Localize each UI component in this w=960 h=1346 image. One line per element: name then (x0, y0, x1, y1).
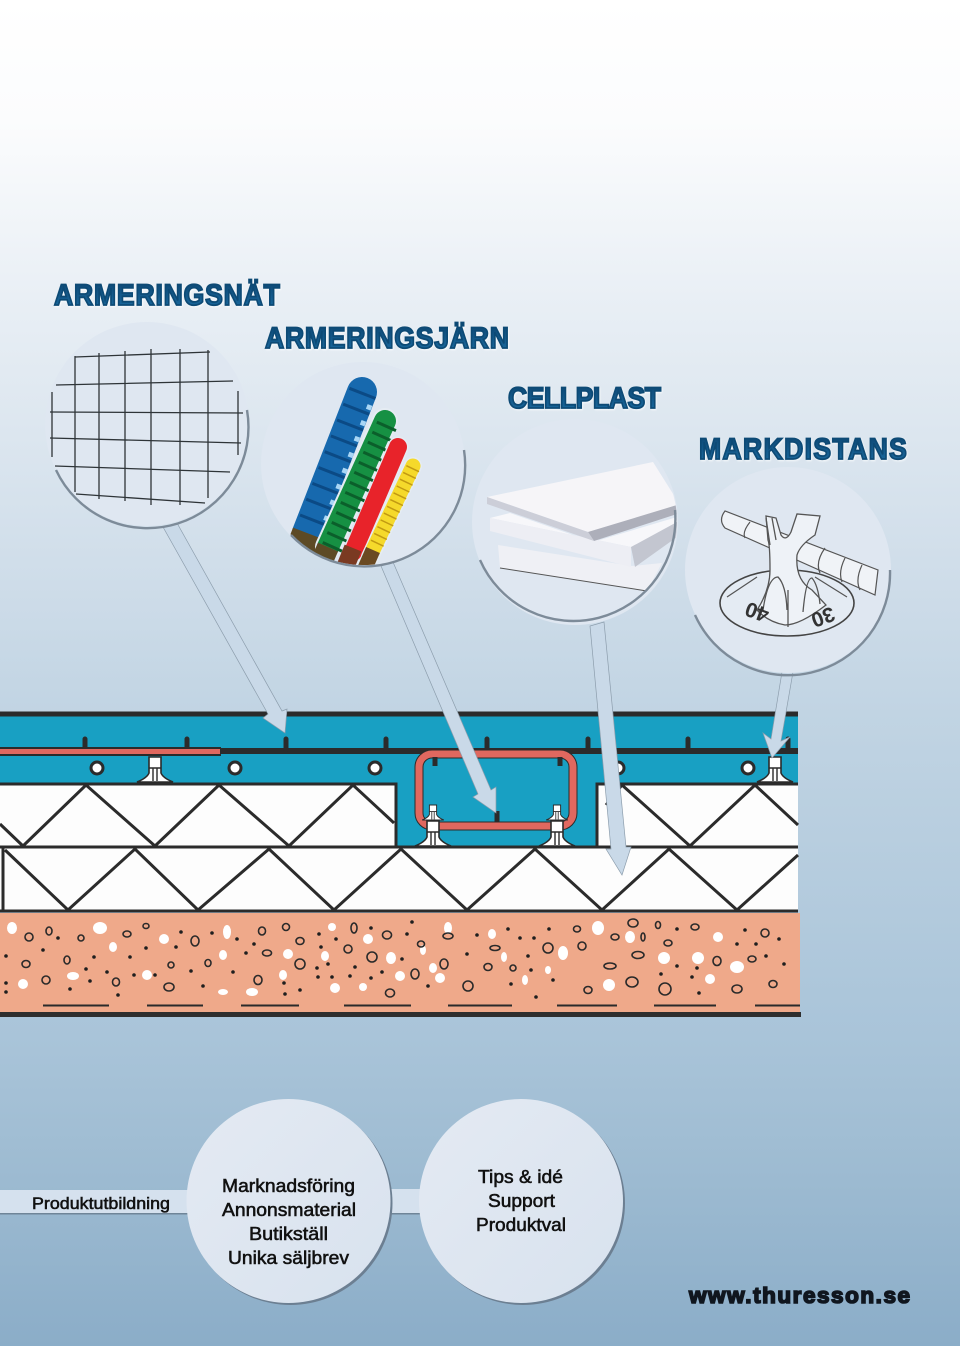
cross-section diagram (0, 713, 801, 1017)
heading: armeringsjärn: ARMERINGSJÄRN (265, 322, 509, 354)
ground layer with gravel (0, 913, 801, 1017)
heading: markdistans: MARKDISTANS (699, 433, 907, 465)
text: support list (476, 1167, 566, 1235)
text: marketing list (222, 1176, 356, 1268)
icon: spacer with rebar: 30 (808, 602, 838, 631)
red reinforcement stirrup (419, 754, 573, 826)
text: support list: Tips & idé (478, 1167, 563, 1187)
panel: cellplast (472, 462, 678, 625)
insulation layers (0, 784, 798, 912)
connector bar (388, 1189, 422, 1214)
icon: spacer with rebar: 40 (742, 597, 772, 626)
arrow: mesh (163, 523, 287, 733)
arrow: spacer (763, 672, 793, 758)
spacers and bars (91, 757, 793, 846)
arrow: insulation (590, 622, 631, 875)
text: marketing list: Butikställ (249, 1224, 328, 1244)
text: marketing list: Marknadsföring (222, 1176, 355, 1196)
text: marketing list: Annonsmaterial (222, 1200, 356, 1220)
icon: spacer with rebar (720, 511, 878, 636)
concrete slab layer (0, 713, 798, 848)
panel: armeringsjärn (265, 377, 466, 568)
text: marketing list: Unika säljbrev (228, 1248, 349, 1268)
panel: markdistans (685, 467, 891, 675)
panel: marketing circle (186, 1099, 392, 1305)
arrow: rebar (381, 562, 496, 813)
label: produktutbildning: Produktutbildning (32, 1195, 170, 1213)
icon: coloured rebars (295, 392, 413, 575)
website address: www.thuresson.se (688, 1283, 910, 1308)
panel: support circle (419, 1099, 625, 1305)
bar: produktutbildning (0, 1190, 192, 1214)
heading: armeringsnät: ARMERINGSNÄT (54, 279, 280, 311)
text: support list: Support (488, 1191, 555, 1211)
icon: wire mesh (50, 349, 243, 505)
heading: cellplast: CELLPLAST (508, 382, 661, 414)
panel: armeringsnät (45, 322, 249, 528)
top steel reinforcement line (0, 714, 798, 756)
icon: insulation boards (487, 462, 680, 591)
text: support list: Produktval (476, 1215, 566, 1235)
